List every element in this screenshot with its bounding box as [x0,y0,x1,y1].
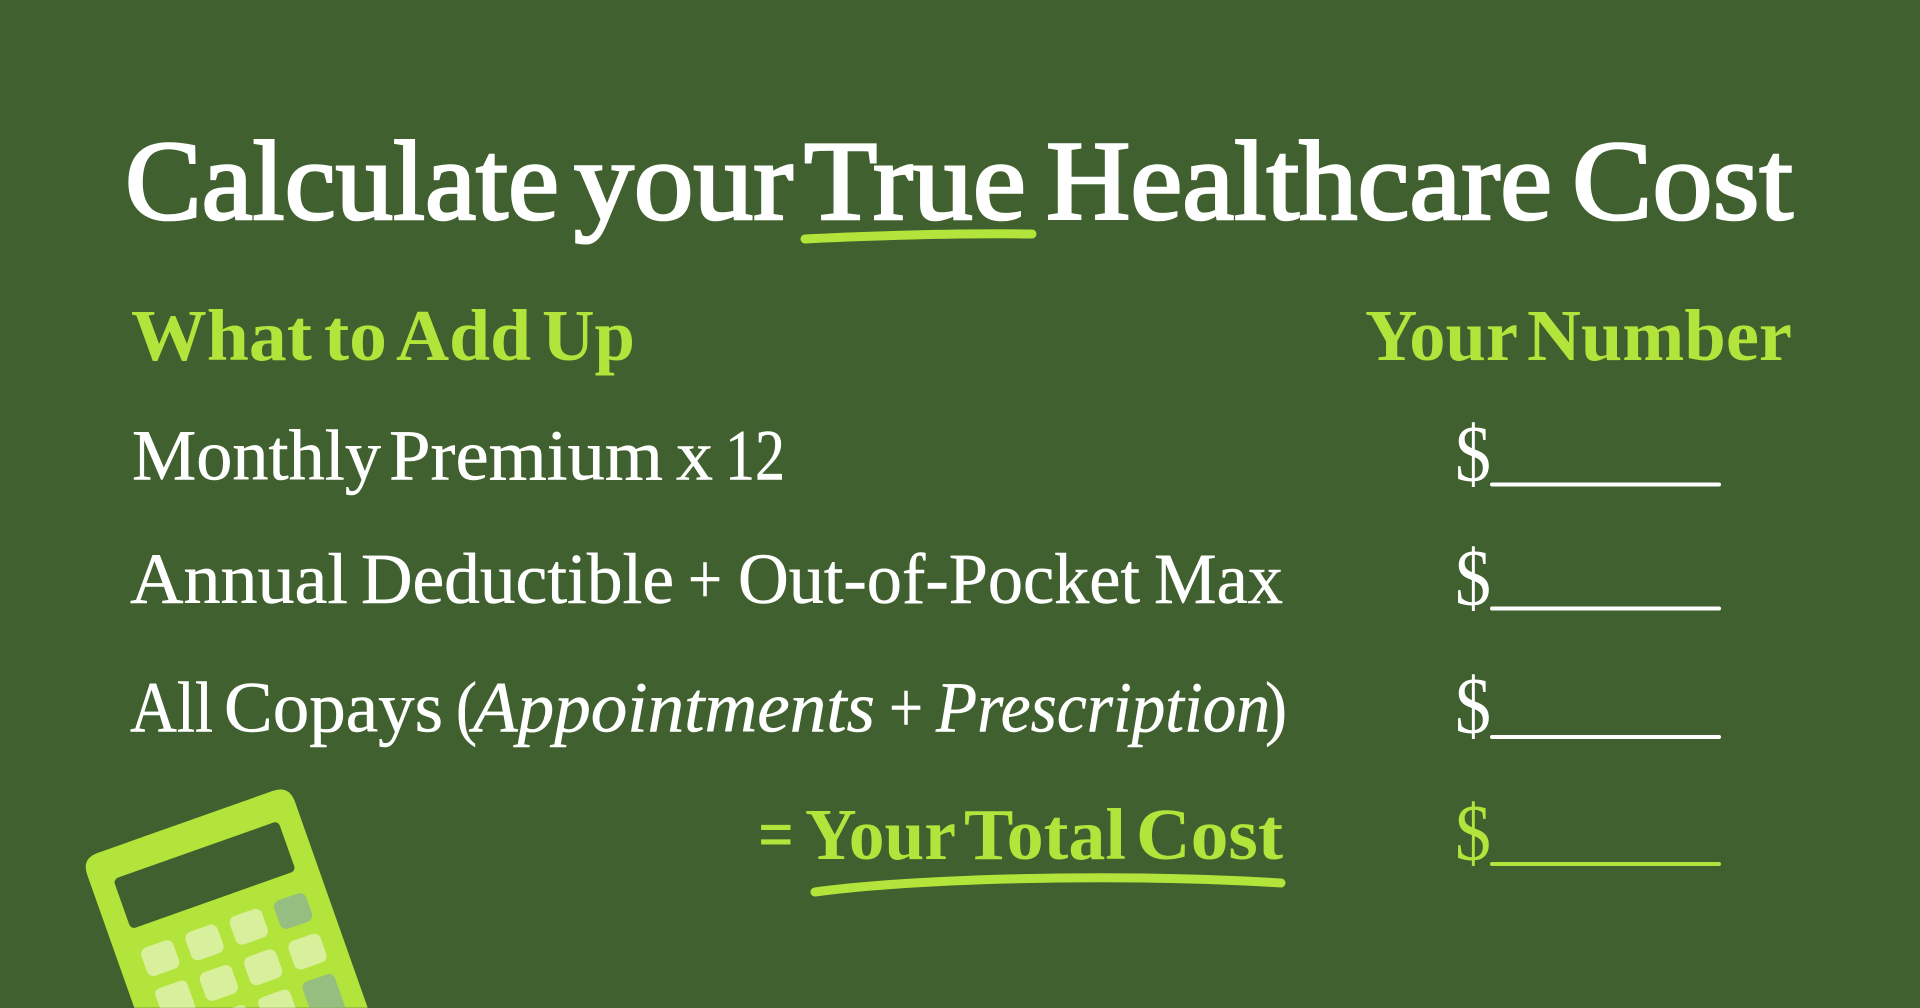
row: total cost: Cost [1136,794,1283,875]
icon: calculator [86,789,368,1008]
blank field 1 [1455,411,1721,499]
blank field 3: $ [1455,663,1491,751]
heading: your number: Your [1365,295,1518,376]
heading: your number [1365,295,1792,376]
blank field: total: $ [1455,790,1491,878]
heading: your number: Number [1527,295,1792,376]
row: copays: Appointments [469,668,875,748]
row: total cost: = [758,794,794,875]
heading: what to add up: What [131,295,312,376]
row: deductible: Deductible [361,539,674,619]
underline: total cost [815,878,1281,892]
heading: what to add up [131,295,635,376]
row: deductible [130,539,1283,619]
blank field 2 [1455,535,1721,623]
title: Healthcare [1046,119,1552,244]
title: Cost [1572,119,1793,244]
row: copays: + [889,668,923,748]
title [125,119,1793,244]
row: monthly premium: 12 [725,416,785,496]
heading: what to add up: to [324,295,387,376]
row: copays: Prescription [935,668,1270,748]
row: copays: ( [456,668,477,748]
row: monthly premium: x [676,416,713,496]
row: copays [130,668,1287,748]
row: monthly premium: Monthly [132,416,381,496]
underline: True [805,234,1032,239]
heading: what to add up: Up [542,295,635,376]
blank field 2: $ [1455,535,1491,623]
row: monthly premium [132,416,785,496]
title: your [574,119,793,244]
heading: what to add up: Add [396,295,531,376]
row: copays: All [130,668,213,748]
row: total cost [758,794,1283,875]
row: deductible: Annual [130,539,348,619]
blank field 1: $ [1455,411,1491,499]
row: deductible: Max [1154,539,1283,619]
blank field 3 [1455,663,1721,751]
row: total cost: Your [805,794,956,875]
title: Calculate [125,119,559,244]
row: copays: Copays [224,668,443,748]
row: monthly premium: Premium [389,416,663,496]
title: True [804,119,1026,244]
row: copays: ) [1265,668,1287,748]
row: deductible: + [688,539,722,619]
row: deductible: Out-of-Pocket [738,539,1140,619]
row: total cost: Total [964,794,1126,875]
blank field: total [1455,790,1721,878]
